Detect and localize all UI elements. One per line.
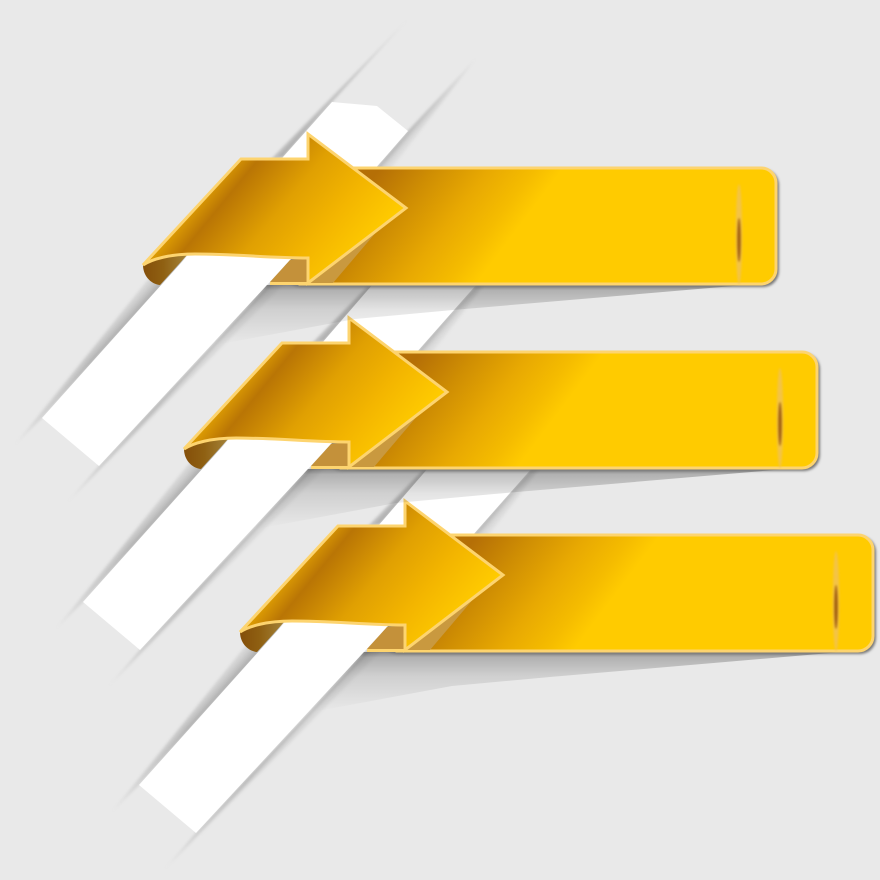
strip shadows 2 bbox=[69, 286, 480, 668]
arrow 3 bbox=[240, 501, 503, 650]
fold bottom edge 1 bbox=[270, 282, 310, 285]
arrow head underside 1 bbox=[310, 230, 378, 283]
bar shadow 3 bbox=[382, 536, 876, 654]
slit 3 bbox=[833, 551, 839, 651]
banner 2: middle bbox=[69, 286, 822, 668]
curl 2 bbox=[184, 438, 229, 469]
slit 2 bbox=[777, 368, 783, 468]
fold bottom edge 2 bbox=[311, 466, 351, 469]
white strip upper 2 bbox=[316, 284, 477, 370]
arrow 2 bbox=[184, 318, 447, 467]
cast shadow below bar 3 bbox=[312, 652, 842, 712]
cast shadow below bar 1 bbox=[215, 285, 745, 345]
slit 1 bbox=[736, 184, 742, 284]
strip shadows 3 bbox=[125, 470, 536, 851]
white strip lower 2 bbox=[83, 439, 333, 650]
fold under arrow 3 bbox=[367, 625, 405, 649]
white strip upper 1 bbox=[275, 102, 408, 186]
white strip lower 1 bbox=[42, 255, 292, 466]
banner bar 3 bbox=[397, 535, 873, 651]
fold under arrow 2 bbox=[311, 442, 349, 466]
arrow 1 bbox=[143, 134, 406, 283]
curl 3 bbox=[240, 621, 285, 652]
banner bar 1 bbox=[300, 168, 776, 284]
arrow head underside 3 bbox=[407, 597, 475, 650]
white strip upper 3 bbox=[372, 467, 533, 553]
banner 3: bottom bbox=[125, 470, 878, 851]
fold bottom edge 3 bbox=[367, 649, 407, 652]
bar shadow 2 bbox=[326, 353, 820, 471]
cast shadow below bar 2 bbox=[256, 469, 786, 529]
bar shadow 1 bbox=[285, 169, 779, 287]
fold under arrow 1 bbox=[270, 258, 308, 282]
white strip lower 3 bbox=[139, 622, 389, 833]
banner bar 2 bbox=[341, 352, 817, 468]
banner 1: top bbox=[28, 48, 781, 484]
curl 1 bbox=[143, 254, 188, 285]
arrow head underside 2 bbox=[351, 414, 419, 467]
strip shadows 1 bbox=[28, 48, 462, 484]
